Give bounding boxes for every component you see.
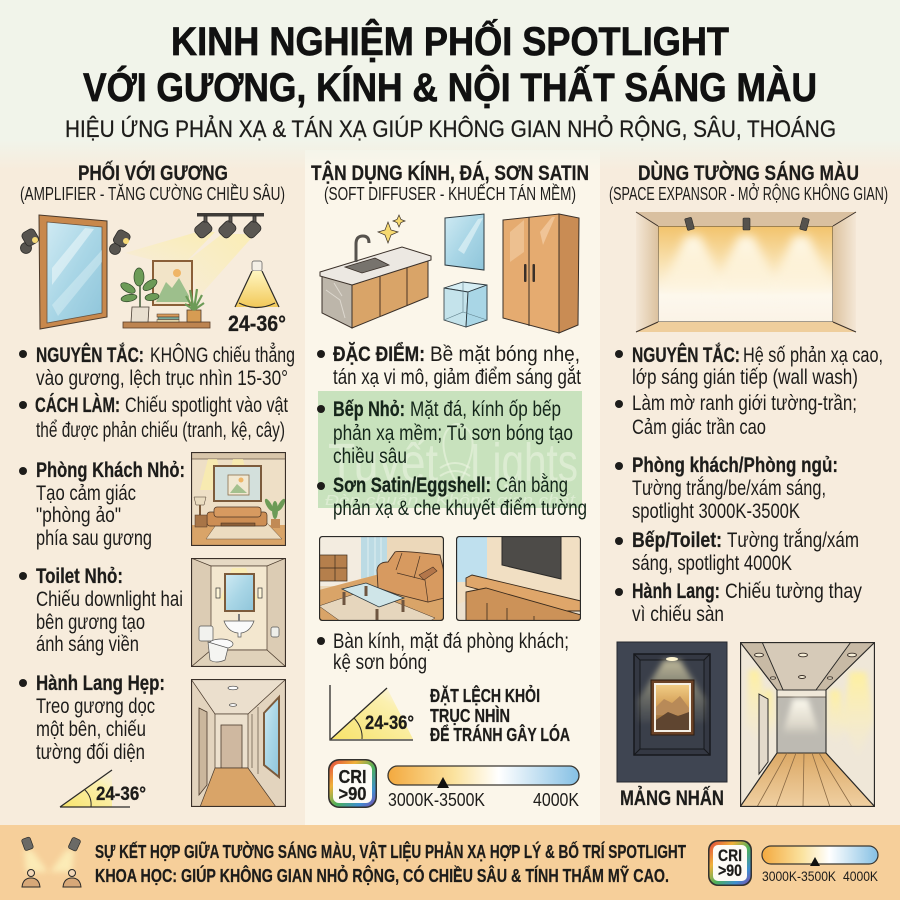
panel: tận dụng kính đá sơn satin [311, 160, 589, 810]
text: sơn satin: phản xạ & che khuyết điểm tường [333, 497, 587, 520]
label: mảng nhấn: MẢNG NHẤN [620, 787, 724, 810]
icon: spotlights and people [21, 837, 81, 887]
text: đặc điểm: Bề mặt bóng nhẹ, [430, 343, 580, 366]
illustration: glossy wardrobe [503, 214, 579, 333]
panel: dùng tường sáng màu [609, 160, 888, 810]
text: phòng khách nhỏ: Phòng Khách Nhỏ: [36, 459, 185, 482]
title [83, 18, 817, 110]
text: hành lang [615, 580, 862, 626]
callout: đặt lệch khỏi trục nhìn: ĐỂ TRÁNH GÂY LÓA [430, 724, 570, 745]
text: hành lang hẹp: Treo gương dọc [36, 695, 155, 718]
text: hành lang: vì chiếu sàn [632, 603, 724, 626]
heading: dùng tường sáng màu [609, 160, 888, 204]
footer color temperature scale: 4000K [843, 868, 879, 884]
text: cách làm: thể được phản chiếu (tranh, kệ, cây) [36, 419, 285, 442]
watermark: Tuyết Lights: Lights [470, 433, 578, 493]
text: nguyên tắc [19, 343, 295, 390]
text: phòng khách nhỏ: Tạo cảm giác [36, 482, 136, 505]
text: phòng khách / phòng ngủ: spotlight 3000K-3500K [632, 500, 800, 523]
text: sơn satin [317, 474, 587, 520]
badge: CRI >90: >90 [338, 784, 366, 804]
title: VỚI GƯƠNG, KÍNH & NỘI THẤT SÁNG MÀU [83, 64, 817, 110]
text: cách làm: Chiếu spotlight vào vật [125, 394, 288, 417]
heading: phối với gương [20, 159, 285, 204]
illustration: living room with glass table [319, 536, 444, 621]
badge: footer CRI >90: CRI [718, 846, 742, 865]
illustration: small living room [191, 452, 287, 546]
text: hành lang: Hành Lang: [632, 580, 720, 603]
illustration: small toilet [191, 558, 286, 667]
text: phòng khách nhỏ: "phòng ảo" [36, 504, 121, 527]
watermark: Tuyết Lights: Đèn chuẩn - Không gian chất [325, 492, 576, 509]
footer band [0, 825, 900, 900]
heading: phối với gương: PHỐI VỚI GƯƠNG [78, 159, 228, 185]
footer color temperature scale [762, 846, 879, 884]
text: bàn kính [317, 630, 569, 674]
text: phòng khách nhỏ: phía sau gương [36, 527, 152, 550]
text: nguyên tắc [615, 343, 883, 389]
text: toilet nhỏ: ánh sáng viền [36, 633, 139, 656]
heading: tận dụng kính: TẬN DỤNG KÍNH, ĐÁ, SƠN SATIN [311, 160, 589, 185]
icon: offset angle: 24-36° [365, 713, 414, 734]
text: đặc điểm: ĐẶC ĐIỂM: [333, 343, 425, 366]
footer color temperature scale: 3000K-3500K [762, 868, 837, 884]
footer text: SỰ KẾT HỢP GIỮA TƯỜNG SÁNG MÀU, VẬT LIỆU PHẢN XẠ HỢP LÝ & BỐ TRÍ SPOTLIGHT [95, 841, 687, 862]
text: đặc điểm: tán xạ vi mô, giảm điểm sáng gắt [333, 366, 581, 389]
badge: CRI >90 [328, 759, 377, 808]
text: đặc điểm [317, 343, 581, 389]
text: cách làm [19, 394, 288, 442]
icon: offset angle [330, 685, 414, 740]
color temperature scale [388, 766, 579, 810]
badge: footer CRI >90: >90 [718, 861, 742, 880]
text: nguyên tắc: NGUYÊN TẮC: [632, 343, 740, 367]
title: KINH NGHIỆM PHỐI SPOTLIGHT [171, 18, 729, 64]
illustration: accent wall with framed art [617, 642, 727, 782]
text: bếp / toilet: Tường trắng/xám [727, 529, 859, 552]
text: toilet nhỏ [19, 565, 183, 656]
callout: đặt lệch khỏi trục nhìn [430, 685, 570, 745]
heading: tận dụng kính [311, 160, 589, 204]
badge: CRI >90: CRI [338, 767, 366, 787]
badge: footer CRI >90 [708, 840, 752, 886]
illustration: mirror with spotlights [20, 213, 264, 329]
text: phòng khách / phòng ngủ: Tường trắng/be/xám sáng, [632, 477, 826, 500]
color temperature scale: 3000K-3500K [388, 790, 485, 810]
illustration: narrow corridor [191, 679, 286, 807]
text: sơn satin: Cân bằng [496, 474, 568, 497]
watermark: Tuyết Lights [318, 391, 582, 509]
callout: đặt lệch khỏi trục nhìn: TRỤC NHÌN [430, 705, 510, 726]
text: làm mờ ranh giới [615, 392, 857, 439]
text: nguyên tắc: NGUYÊN TẮC: [36, 343, 144, 367]
footer text [95, 841, 687, 886]
illustration: wall wash room [636, 212, 856, 332]
icon: angle 24-36 [60, 770, 146, 807]
text: bếp nhỏ: Mặt đá, kính ốp bếp [410, 398, 561, 421]
watermark: Tuyết Lights: Tuyết [328, 433, 438, 493]
text: nguyên tắc: vào gương, lệch trục nhìn 15-30° [36, 367, 288, 390]
text: bếp / toilet: Bếp/Toilet: [632, 529, 722, 552]
text: toilet nhỏ: Chiếu downlight hai [36, 588, 183, 611]
panel: phối với gương [19, 159, 295, 807]
footer text: KHOA HỌC: GIÚP KHÔNG GIAN NHỎ RỘNG, CÓ CHIỀU SÂU & TÍNH THẨM MỸ CAO. [95, 865, 669, 886]
text: nguyên tắc: KHÔNG chiếu thẳng [150, 343, 295, 367]
color temperature scale: 4000K [533, 790, 579, 810]
illustration: kitchen counter [320, 215, 431, 328]
icon: beam angle 24-36: 24-36° [228, 311, 286, 336]
heading: phối với gương: (AMPLIFIER - TĂNG CƯỜNG CHIỀU SÂU) [20, 183, 285, 204]
text: bàn kính: Bàn kính, mặt đá phòng khách; [333, 630, 569, 653]
text: phòng khách / phòng ngủ: Phòng khách/Phòng ngủ: [632, 454, 838, 477]
text: bếp nhỏ: Bếp Nhỏ: [333, 398, 405, 421]
text: làm mờ ranh giới: Cảm giác trần cao [632, 416, 766, 439]
text: hành lang hẹp: tường đối diện [36, 741, 145, 764]
illustration: tv shelf [456, 536, 581, 621]
text: hành lang: Chiếu tường thay [725, 580, 862, 603]
text: bàn kính: kệ sơn bóng [333, 651, 427, 674]
illustration: bright corridor [740, 642, 875, 807]
text: hành lang hẹp: Hành Lang Hẹp: [36, 672, 165, 695]
text: toilet nhỏ: Toilet Nhỏ: [36, 565, 123, 588]
text: phòng khách nhỏ [19, 459, 185, 550]
icon: angle 24-36: 24-36° [96, 784, 146, 805]
text: sơn satin: Sơn Satin/Eggshell: [333, 474, 491, 497]
text: bếp nhỏ [317, 398, 573, 468]
text: toilet nhỏ: bên gương tạo [36, 611, 145, 634]
icon: beam angle 24-36 [228, 261, 286, 336]
heading: tận dụng kính: (SOFT DIFFUSER - KHUẾCH TÁN MỀM) [324, 183, 576, 204]
text: hành lang hẹp: một bên, chiếu [36, 718, 146, 741]
text: phòng khách / phòng ngủ [615, 454, 838, 523]
text: hành lang hẹp [19, 672, 165, 764]
callout: đặt lệch khỏi trục nhìn: ĐẶT LỆCH KHỎI [430, 685, 540, 706]
text: bếp / toilet: sáng, spotlight 4000K [632, 552, 792, 575]
text: bếp nhỏ: phản xạ mềm; Tủ sơn bóng tạo [333, 422, 573, 445]
illustration: glass panel and cube [444, 214, 487, 327]
text: bếp nhỏ: chiều sâu [333, 445, 407, 468]
text: bếp / toilet [615, 529, 859, 575]
text: cách làm: CÁCH LÀM: [35, 394, 120, 417]
